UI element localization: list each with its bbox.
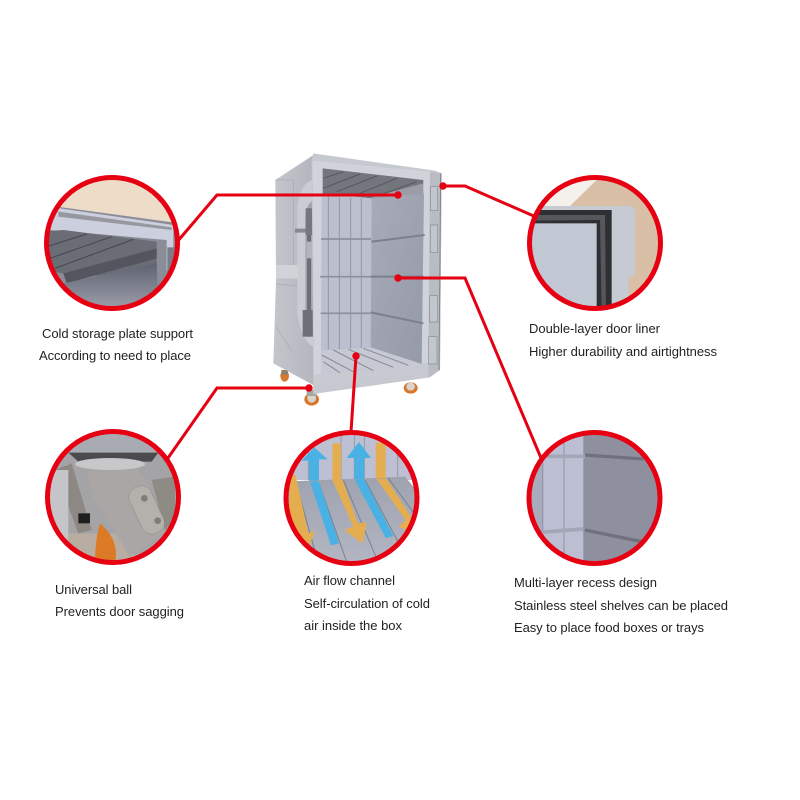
callout circle: recess xyxy=(523,428,663,568)
side panel xyxy=(273,154,315,386)
caption: plate support: According to need to place xyxy=(39,348,191,363)
connector: air flow xyxy=(351,354,358,432)
connector: universal ball xyxy=(168,386,311,458)
caption: plate support xyxy=(39,326,193,363)
connector: recess xyxy=(396,276,541,458)
caption: plate support: Cold storage plate support xyxy=(42,326,193,341)
callout circle: plate support xyxy=(40,173,180,313)
caption: air flow: Self-circulation of cold xyxy=(304,596,430,611)
side latch xyxy=(303,208,315,337)
caption: air flow: air inside the box xyxy=(304,618,402,633)
caption: door liner: Double-layer door liner xyxy=(529,321,661,336)
connector: plate support xyxy=(177,193,400,242)
caption: recess xyxy=(514,575,728,635)
callout circle: door liner xyxy=(523,173,663,313)
front frame xyxy=(312,153,442,394)
casters xyxy=(280,370,418,406)
connector: door liner xyxy=(441,184,536,217)
hinge column xyxy=(428,172,442,377)
inner ceiling xyxy=(323,168,423,198)
caption: air flow: Air flow channel xyxy=(304,573,395,588)
caption: universal ball: Universal ball xyxy=(55,582,132,597)
caption: recess: Multi-layer recess design xyxy=(514,575,657,590)
floor xyxy=(321,347,422,375)
callout circle: air flow xyxy=(282,430,422,567)
arrows xyxy=(332,443,341,480)
caption: door liner: Higher durability and airtightness xyxy=(529,344,718,359)
product: insulated cabinet xyxy=(273,153,442,406)
caption: air flow xyxy=(304,573,430,633)
caption: recess: Stainless steel shelves can be placed xyxy=(514,598,728,613)
caption: door liner xyxy=(529,321,718,359)
callout circle: universal ball xyxy=(42,427,185,570)
caption: universal ball: Prevents door sagging xyxy=(55,604,184,619)
right wall xyxy=(371,193,424,364)
back wall xyxy=(321,193,372,351)
caption: universal ball xyxy=(55,582,184,619)
caption: recess: Easy to place food boxes or trays xyxy=(514,620,704,635)
